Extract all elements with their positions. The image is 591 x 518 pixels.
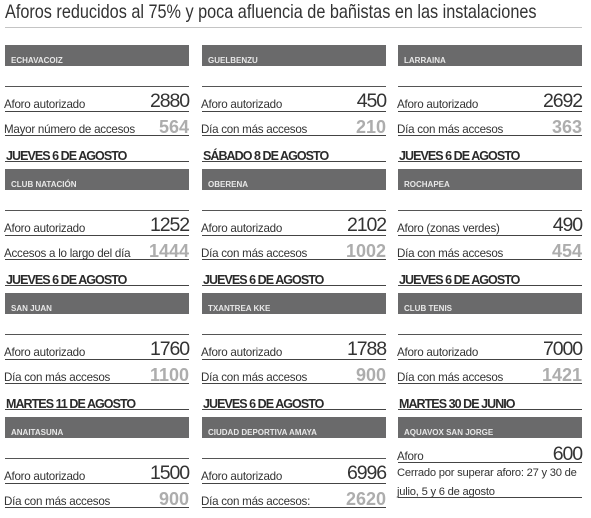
panel: Rochapea: Día con más accesos (397, 247, 503, 260)
panel: San Juan (4, 293, 190, 411)
panel: Larraina: 2692 (543, 90, 582, 112)
panel: Oberena: Día con más accesos (201, 247, 307, 260)
panel: Club Tenis: MARTES 30 DE JUNIO (399, 397, 515, 411)
panel: Txantrea KKE: 900 (356, 365, 386, 385)
panel: Txantrea KKE: 1788 (347, 338, 386, 360)
panel: Larraina: 363 (552, 117, 582, 137)
panel: Larraina: Aforo autorizado (397, 98, 478, 111)
panel: San Juan: 1760 (150, 338, 189, 360)
panel: Club Tenis: 7000 (543, 338, 582, 360)
panel: Anaitasuna: Aforo autorizado (4, 470, 85, 483)
panel: Echavacoiz: ECHAVACOIZ (11, 56, 63, 65)
panel: Guelbenzu: 450 (357, 90, 386, 112)
panel: San Juan: 1100 (150, 365, 189, 385)
panel: Guelbenzu: SÁBADO 8 DE AGOSTO (203, 149, 328, 163)
panel: Echavacoiz: JUEVES 6 DE AGOSTO (6, 149, 126, 163)
panel: Aquavox San Jorge (396, 417, 582, 498)
panel: Ciudad Deportiva Amaya: 2620 (346, 489, 386, 509)
panel: Aquavox San Jorge: Cerrado por superar aforo: 27 y 30 de (397, 467, 577, 479)
panel: Guelbenzu: GUELBENZU (208, 56, 258, 65)
panel: Echavacoiz: Aforo autorizado (4, 98, 85, 111)
panel: Rochapea (397, 169, 582, 287)
panel: Txantrea KKE (201, 293, 386, 411)
panel: Larraina: LARRAINA (404, 56, 446, 65)
panel: Club Natación: Aforo autorizado (4, 222, 85, 235)
panel: Guelbenzu: Aforo autorizado (201, 98, 282, 111)
panel: Larraina: JUEVES 6 DE AGOSTO (399, 149, 519, 163)
panel: Echavacoiz: 2880 (150, 90, 189, 112)
panel: San Juan: Aforo autorizado (4, 346, 85, 359)
panel: Oberena: Aforo autorizado (201, 222, 282, 235)
panel: Aquavox San Jorge: julio, 5 y 6 de agosto (397, 486, 495, 498)
panel: Club Natación (4, 169, 190, 287)
panel: Ciudad Deportiva Amaya: Aforo autorizado (201, 470, 282, 483)
panel: Rochapea: Aforo (zonas verdes) (397, 222, 500, 235)
panel: Ciudad Deportiva Amaya (201, 417, 386, 509)
panel: San Juan: Día con más accesos (4, 371, 110, 384)
panel: Guelbenzu: 210 (356, 117, 386, 137)
panel: Club Tenis (397, 293, 582, 411)
panel: Club Natación: 1252 (150, 214, 189, 236)
panel: Rochapea: 454 (552, 241, 582, 261)
panel: Larraina: Día con más accesos (397, 123, 503, 136)
panel: Club Tenis: Día con más accesos (397, 371, 503, 384)
panel: Club Natación: 1444 (149, 241, 189, 261)
panel: Ciudad Deportiva Amaya: 6996 (347, 462, 386, 484)
panel: Club Tenis: Aforo autorizado (397, 346, 478, 359)
panel: Txantrea KKE: TXANTREA KKE (208, 304, 270, 313)
panel: Echavacoiz (4, 45, 190, 163)
panel: Oberena: 1002 (346, 241, 386, 261)
panel: Aquavox San Jorge: 600 (553, 443, 582, 465)
panel: Ciudad Deportiva Amaya: Día con más accesos: (201, 495, 310, 508)
panel: Oberena: JUEVES 6 DE AGOSTO (203, 273, 323, 287)
panel: Club Natación: Accesos a lo largo del día (4, 247, 130, 260)
panel: Rochapea: 490 (553, 214, 582, 236)
panel: Guelbenzu: Día con más accesos (201, 123, 307, 136)
panel: Txantrea KKE: Aforo autorizado (201, 346, 282, 359)
panel: Anaitasuna: 1500 (150, 462, 189, 484)
panel: Anaitasuna: Día con más accesos (4, 495, 110, 508)
panel: Echavacoiz: 564 (159, 117, 189, 137)
title: Aforos reducidos al 75% y poca afluencia de bañistas en las instalaciones (5, 2, 536, 23)
panel: Txantrea KKE: JUEVES 6 DE AGOSTO (203, 397, 323, 411)
panel: Rochapea: JUEVES 6 DE AGOSTO (399, 273, 519, 287)
panel: Club Tenis: CLUB TENIS (404, 304, 452, 313)
panel: Anaitasuna: 900 (159, 489, 189, 509)
panel: Anaitasuna: ANAITASUNA (11, 428, 63, 437)
panel: Larraina (397, 45, 582, 163)
panel: Ciudad Deportiva Amaya: CIUDAD DEPORTIVA AMAYA (208, 428, 317, 437)
panel: San Juan: SAN JUAN (11, 304, 52, 313)
panel: Oberena: OBERENA (208, 180, 248, 189)
panel: Guelbenzu (201, 45, 386, 163)
panel: Anaitasuna (4, 417, 190, 509)
panel: Txantrea KKE: Día con más accesos (201, 371, 307, 384)
panel: San Juan: MARTES 11 DE AGOSTO (6, 397, 135, 411)
panel: Aquavox San Jorge: Aforo (397, 450, 423, 463)
panel: Oberena (201, 169, 386, 287)
panel: Oberena: 2102 (347, 214, 386, 236)
panel: Club Tenis: 1421 (542, 365, 582, 385)
panel: Club Natación: CLUB NATACIÓN (11, 180, 76, 189)
panel: Echavacoiz: Mayor número de accesos (4, 123, 135, 136)
panel: Rochapea: ROCHAPEA (404, 180, 450, 189)
panel: Club Natación: JUEVES 6 DE AGOSTO (6, 273, 126, 287)
panel: Aquavox San Jorge: AQUAVOX SAN JORGE (404, 428, 493, 437)
